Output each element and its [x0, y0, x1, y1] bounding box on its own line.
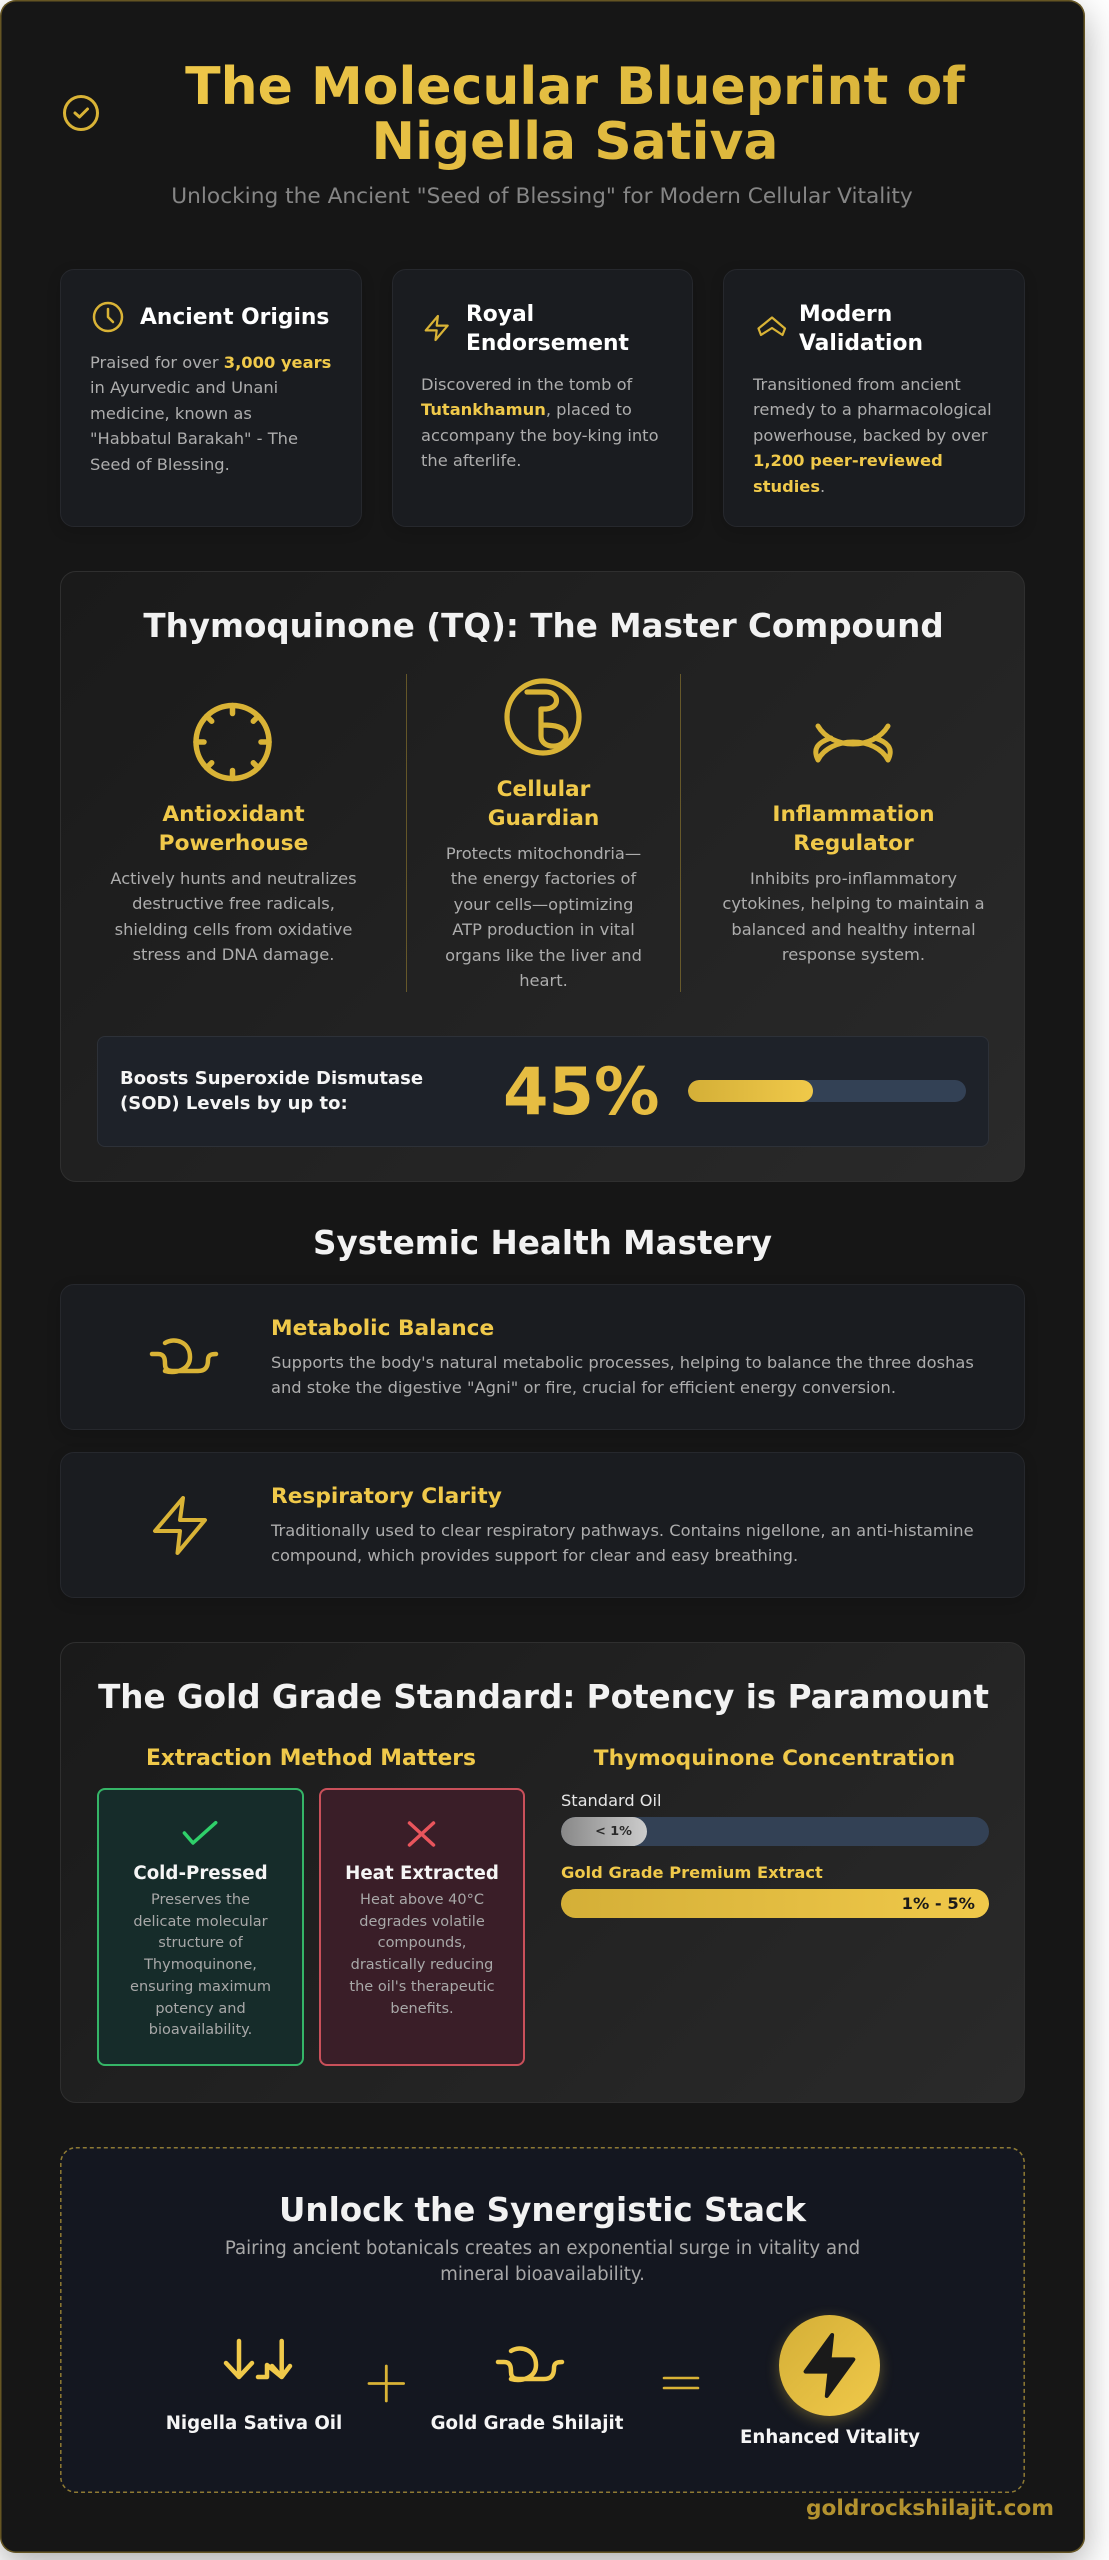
- description: antioxidant: shielding cells from oxidative: [115, 920, 352, 939]
- heading: concentration: Thymoquinone Concentration: [594, 1746, 955, 1771]
- icon: bolt: [152, 1496, 208, 1555]
- description: inflammation: cytokines, helping to maintain a: [722, 894, 985, 913]
- icon: x: [408, 1821, 436, 1847]
- text: cold-pressed: structure of: [158, 1935, 243, 1951]
- panel: SOD stat: [97, 1036, 989, 1147]
- heading: cellular guardian: Guardian: [488, 806, 599, 831]
- text: modern validation: Transitioned from ancient: [753, 375, 961, 394]
- text: cold-pressed: ensuring maximum: [130, 1979, 271, 1995]
- description: cellular guardian: ATP production in vital: [452, 920, 635, 939]
- heading: royal endorsement: [466, 302, 629, 356]
- text: respiratory: Traditionally used to clear respiratory pathways. Contains nigellone, an anti-histamine: [271, 1521, 974, 1540]
- stat: 45%: 45%: [503, 1054, 660, 1130]
- text: modern validation: [752, 375, 992, 496]
- text: modern validation: remedy to a pharmacological: [753, 400, 992, 419]
- description: cellular guardian: organs like the liver and: [445, 946, 642, 965]
- text: ancient origins: Praised for over 3,000 years: [90, 353, 331, 372]
- text: royal endorsement: accompany the boy-king into: [421, 426, 659, 445]
- progress fill: [688, 1080, 813, 1102]
- heading: systemic: Systemic Health Mastery: [313, 1224, 772, 1262]
- icon: oil arrows: [226, 2341, 290, 2377]
- icon: plus: [369, 2366, 404, 2401]
- panel: gold grade: [60, 1642, 1025, 2103]
- description: cellular guardian: heart.: [519, 971, 568, 990]
- description: inflammation: response system.: [782, 945, 925, 964]
- text: cold-pressed: bioavailability.: [149, 2022, 252, 2038]
- footer brand: goldrockshilajit.com: [806, 2496, 1054, 2521]
- heading: cellular guardian: [488, 777, 599, 831]
- text: cold-pressed: delicate molecular: [133, 1914, 268, 1930]
- icon: chevron: [757, 316, 786, 336]
- text: respiratory: [270, 1521, 974, 1565]
- heading: cold-pressed: Cold-Pressed: [133, 1863, 268, 1884]
- progress bar: SOD: [688, 1080, 966, 1102]
- heading: royal endorsement: Royal: [466, 302, 534, 326]
- description: cellular guardian: your cells—optimizing: [454, 895, 633, 914]
- panel: respiratory clarity: [60, 1452, 1025, 1598]
- label: shilajit: Gold Grade Shilajit: [431, 2413, 623, 2434]
- panel: cold-pressed: [97, 1788, 304, 2066]
- panel: heat extracted: [319, 1788, 525, 2066]
- text: ancient origins: Seed of Blessing.: [90, 455, 230, 474]
- label: vitality: Enhanced Vitality: [740, 2427, 920, 2448]
- description: cellular guardian: the energy factories of: [451, 869, 636, 888]
- panel: metabolic balance: [60, 1284, 1025, 1430]
- bar: standard oil: [561, 1817, 989, 1846]
- text: ancient origins: [90, 353, 331, 474]
- text: cold-pressed: [130, 1892, 271, 2038]
- heading: modern validation: [799, 302, 923, 356]
- icon: inflammation: [813, 724, 893, 762]
- description: cellular guardian: Protects mitochondria—: [446, 844, 641, 863]
- text: stack: [225, 2238, 860, 2285]
- heading: gold grade: The Gold Grade Standard: Potency is Paramount: [98, 1678, 989, 1716]
- icon: antioxidant dial: [193, 702, 272, 782]
- text: cellular guardian: [445, 777, 642, 990]
- icon: metabolic: [150, 1338, 218, 1374]
- subtitle: Unlocking the Ancient "Seed of Blessing" for Modern Cellular Vitality: [171, 184, 913, 209]
- text: metabolic: Supports the body's natural metabolic processes, helping to balance the three doshas: [271, 1353, 974, 1372]
- text: SOD label: [120, 1068, 423, 1114]
- description: inflammation: [722, 869, 985, 964]
- text: SOD label: (SOD) Levels by up to:: [120, 1093, 348, 1114]
- text: heat extracted: benefits.: [390, 2001, 454, 2017]
- icon: clock: [92, 302, 124, 332]
- text: cold-pressed: potency and: [155, 2001, 246, 2017]
- text: inflammation: [722, 802, 985, 964]
- text: heat extracted: degrades volatile: [359, 1914, 485, 1930]
- bar: gold grade: 1% - 5%: [902, 1894, 975, 1913]
- panel: synergistic stack: [60, 2147, 1025, 2493]
- icon: filled bolt: [804, 2333, 856, 2398]
- heading: antioxidant: Antioxidant: [162, 802, 305, 827]
- icon: bolt: [424, 314, 449, 342]
- icon: check: [182, 1820, 218, 1845]
- text: respiratory: compound, which provides support for clear and easy breathing.: [271, 1546, 798, 1565]
- title: Nigella Sativa: [372, 112, 778, 172]
- heading: ancient origins: Ancient Origins: [140, 305, 329, 330]
- text: cold-pressed: Thymoquinone,: [144, 1957, 257, 1973]
- text: ancient origins: in Ayurvedic and Unani: [90, 378, 278, 397]
- description: antioxidant: [110, 869, 357, 964]
- description: cellular guardian: [445, 844, 642, 990]
- heading: inflammation: Inflammation: [772, 802, 935, 827]
- panel: modern validation: [723, 269, 1025, 527]
- description: antioxidant: Actively hunts and neutralizes: [110, 869, 357, 888]
- text: heat extracted: compounds,: [378, 1935, 466, 1951]
- text: cold-pressed: Preserves the: [151, 1892, 250, 1908]
- panel: thymoquinone: [60, 571, 1025, 1182]
- text: heat extracted: [349, 1892, 495, 2017]
- heading: antioxidant: [159, 802, 308, 856]
- text: ancient origins: medicine, known as: [90, 404, 252, 423]
- text: heat extracted: drastically reducing: [351, 1957, 493, 1973]
- heading: respiratory: Respiratory Clarity: [271, 1484, 502, 1509]
- heading: modern validation: Validation: [799, 330, 923, 356]
- heading: thymoquinone: Thymoquinone (TQ): The Master Compound: [143, 607, 944, 645]
- panel: royal endorsement: [392, 269, 693, 527]
- description: inflammation: balanced and healthy internal: [731, 920, 976, 939]
- text: royal endorsement: Discovered in the tomb of: [421, 375, 632, 394]
- description: antioxidant: destructive free radicals,: [132, 894, 335, 913]
- bar: gold grade: [561, 1889, 989, 1918]
- icon: check circle: [63, 95, 99, 131]
- heading: inflammation: [772, 802, 935, 856]
- heading: metabolic: Metabolic Balance: [271, 1316, 494, 1341]
- heading: extraction: Extraction Method Matters: [146, 1746, 476, 1771]
- text: royal endorsement: the afterlife.: [421, 451, 521, 470]
- text: SOD label: Boosts Superoxide Dismutase: [120, 1068, 423, 1089]
- description: antioxidant: stress and DNA damage.: [133, 945, 334, 964]
- text: ancient origins: "Habbatul Barakah" - The: [90, 429, 298, 448]
- text: heat extracted: the oil's therapeutic: [349, 1979, 495, 1995]
- bar fill: under 1%: < 1%: [595, 1824, 632, 1839]
- label: gold grade extract: Gold Grade Premium Extract: [561, 1863, 823, 1882]
- text: antioxidant: [110, 802, 357, 964]
- text: royal endorsement: [421, 375, 659, 470]
- text: royal endorsement: Tutankhamun, placed to: [421, 400, 632, 419]
- title: The Molecular Blueprint of: [185, 57, 965, 117]
- diagram icons: [224, 2338, 700, 2402]
- heading: antioxidant: Powerhouse: [159, 831, 308, 856]
- bar fill: under 1%: [561, 1817, 647, 1846]
- icon: equals: [664, 2378, 698, 2388]
- panel: ancient origins: [60, 269, 362, 527]
- label: standard oil: Standard Oil: [561, 1791, 662, 1810]
- text: modern validation: powerhouse, backed by over: [753, 426, 988, 445]
- text: modern validation: studies.: [753, 477, 825, 496]
- text: stack: mineral bioavailability.: [440, 2264, 645, 2285]
- heading: royal endorsement: Endorsement: [466, 330, 629, 356]
- heading: stack: Unlock the Synergistic Stack: [279, 2191, 806, 2229]
- text: metabolic: [271, 1353, 974, 1397]
- description: inflammation: Inhibits pro-inflammatory: [750, 869, 957, 888]
- heading: cellular guardian: Cellular: [497, 777, 590, 802]
- icon: vitality circle: [779, 2315, 880, 2416]
- text: metabolic: and stoke the digestive "Agni" or fire, crucial for efficient energy conversion.: [271, 1378, 896, 1397]
- heading: modern validation: Modern: [799, 302, 892, 326]
- icon: shilajit: [498, 2349, 562, 2380]
- text: stack: Pairing ancient botanicals creates an exponential surge in vitality and: [225, 2238, 860, 2259]
- icon: cellular guardian: [504, 678, 582, 756]
- text: heat extracted: Heat above 40°C: [360, 1892, 484, 1908]
- title: [93, 60, 1057, 170]
- heading: inflammation: Regulator: [793, 831, 914, 856]
- label: nigella: Nigella Sativa Oil: [166, 2413, 342, 2434]
- heading: heat extracted: Heat Extracted: [345, 1863, 499, 1884]
- text: modern validation: 1,200 peer-reviewed: [753, 451, 943, 470]
